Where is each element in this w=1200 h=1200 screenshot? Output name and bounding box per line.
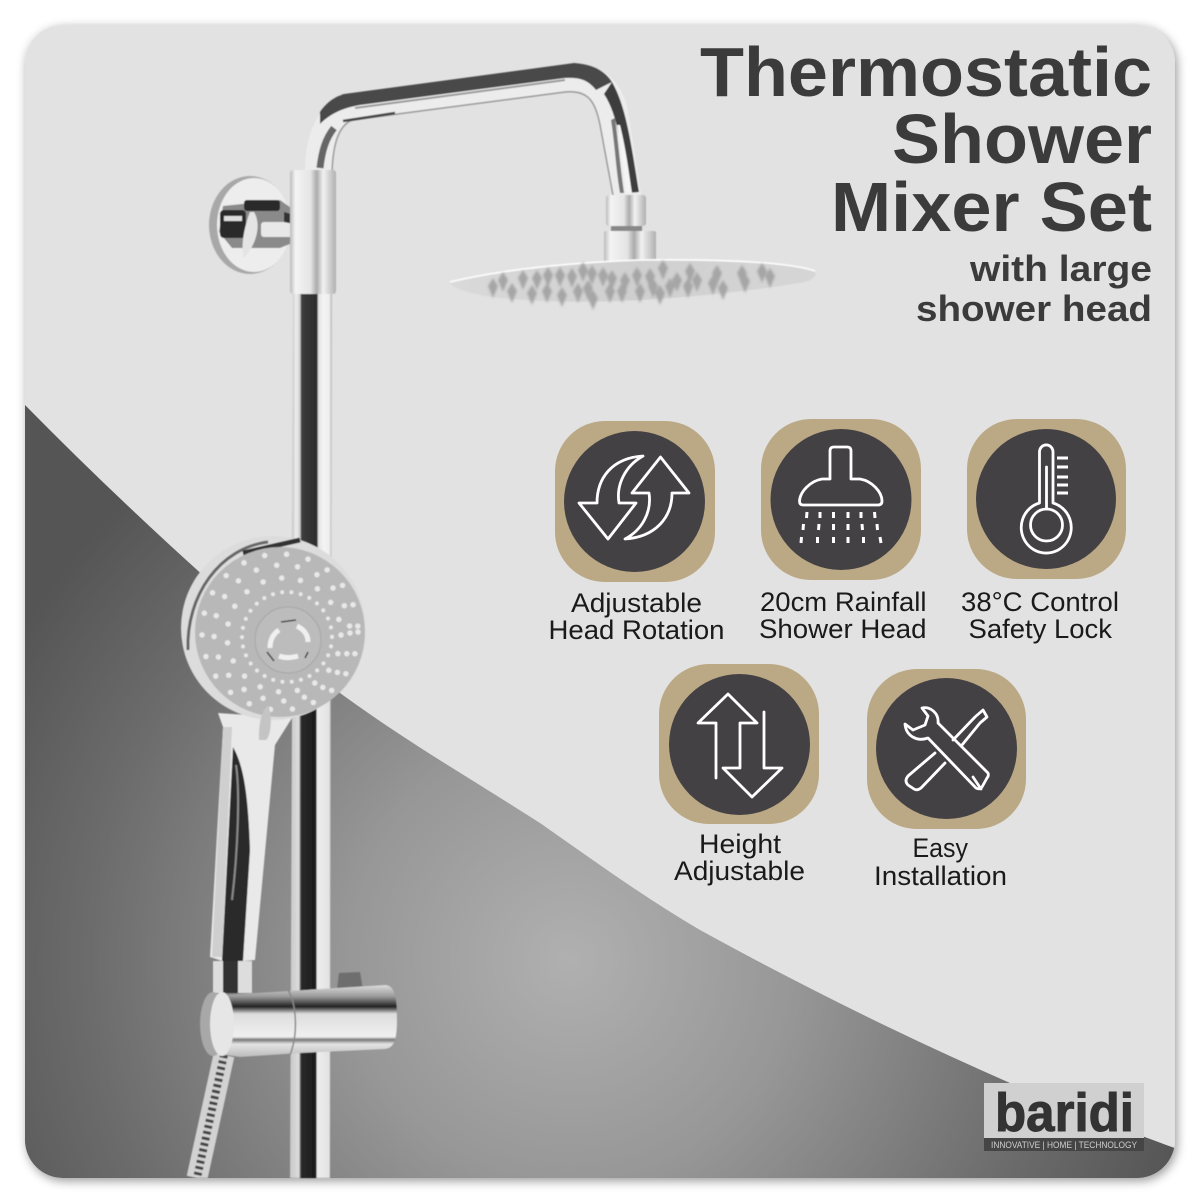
icon: wrench and screwdriver [905, 708, 988, 790]
title: Mixer Set [831, 168, 1152, 246]
feature: adjustable head rotation [548, 421, 724, 645]
label [548, 588, 724, 645]
icon: rotation arrows [579, 456, 689, 539]
label [961, 587, 1119, 644]
rain head neck [604, 195, 656, 263]
label: 20cm Rainfall [760, 587, 926, 617]
label: Shower Head [759, 614, 926, 644]
icon: thermometer [1021, 445, 1071, 553]
rainfall shower head [450, 260, 816, 310]
product: shower system [181, 63, 816, 1180]
label: Adjustable [674, 856, 805, 886]
logo: baridi: baridi [995, 1083, 1134, 1143]
label: Installation [874, 861, 1007, 891]
hand shower handle [210, 713, 292, 993]
title: Thermostatic [700, 33, 1152, 111]
label [759, 587, 926, 644]
label [674, 829, 805, 886]
label: Head Rotation [548, 615, 724, 645]
hose [197, 1055, 224, 1178]
spray hub [255, 607, 321, 673]
thumb tab [259, 706, 271, 740]
title [700, 33, 1152, 329]
feature: rainfall shower head [759, 419, 926, 644]
logo: baridi: INNOVATIVE | HOME | TECHNOLOGY [991, 1140, 1137, 1150]
title: with large [969, 248, 1152, 289]
label: 38°C Control [961, 587, 1119, 617]
feature: height adjustable [659, 664, 819, 886]
shower arm [305, 63, 641, 195]
rain nozzles [488, 260, 775, 310]
feature: easy installation [867, 669, 1026, 891]
title: Shower [892, 100, 1152, 178]
pole collar [290, 170, 336, 294]
label: Safety Lock [968, 614, 1113, 644]
dark curved background [20, 405, 1180, 1180]
title: shower head [916, 288, 1152, 329]
slider clamp [200, 972, 397, 1057]
main riser pole [290, 285, 332, 1180]
label: Adjustable [571, 588, 702, 618]
icon: up and down arrows [698, 694, 782, 797]
spray nozzles [202, 554, 358, 710]
wall bracket [209, 176, 305, 274]
feature: temperature control [961, 419, 1126, 644]
label: Height [699, 829, 782, 859]
icon: shower head [800, 447, 882, 543]
label: Easy [912, 833, 968, 863]
label [874, 833, 1007, 891]
hand shower head [181, 536, 365, 740]
